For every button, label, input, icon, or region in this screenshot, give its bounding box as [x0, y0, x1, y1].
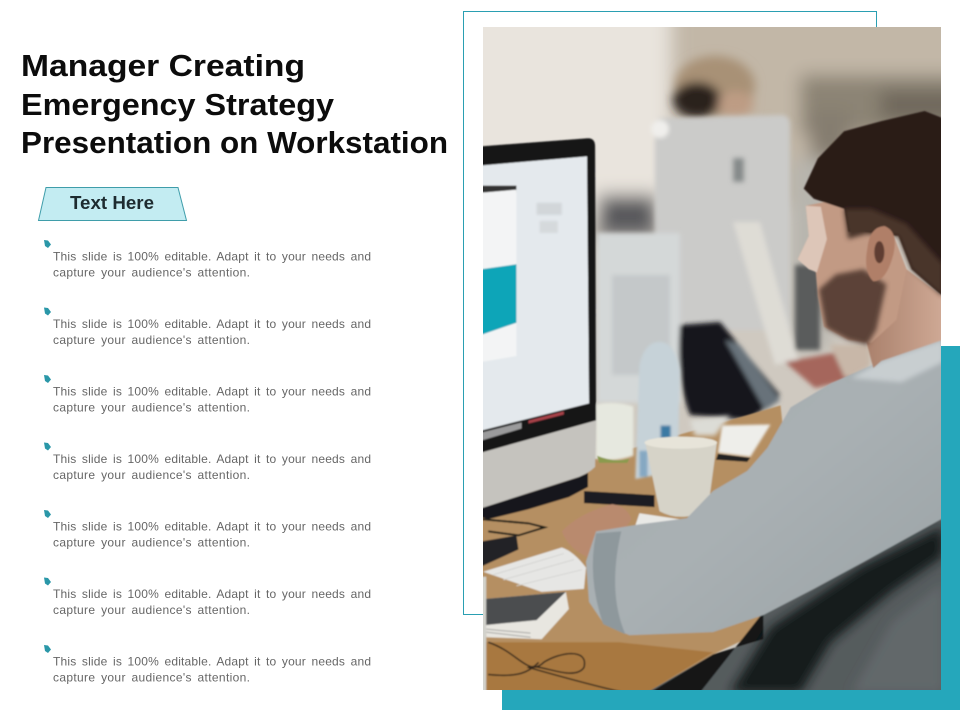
hair	[804, 111, 943, 297]
grey sweater	[586, 340, 943, 635]
bullet item 1	[44, 240, 371, 280]
heading tag: Text Here	[38, 188, 186, 220]
bullet item 7: This slide is 100% editable. Adapt it to your needs and	[53, 654, 371, 668]
photo: man at workstation	[483, 27, 941, 690]
paper on desk	[718, 425, 770, 457]
monitor chin	[481, 420, 596, 508]
bullet item 7	[44, 645, 371, 684]
background wall and shelves	[483, 27, 941, 352]
cables and black phone	[584, 491, 655, 507]
background monitor back	[651, 115, 790, 330]
heading tag: Text Here: Text Here	[70, 193, 154, 213]
title	[21, 48, 448, 160]
bullet item 2: capture your audience's attention.	[53, 333, 250, 347]
bullet item 5	[44, 510, 371, 550]
cable on desk	[488, 642, 624, 693]
bullet item 1: This slide is 100% editable. Adapt it to your needs and	[53, 250, 371, 264]
teal backing block	[502, 346, 960, 710]
bullet list	[44, 240, 371, 684]
neck	[863, 269, 943, 368]
bullet item 2: This slide is 100% editable. Adapt it to your needs and	[53, 317, 371, 331]
background person	[673, 56, 755, 118]
ear	[866, 226, 895, 281]
keyboard	[483, 513, 680, 592]
hand	[562, 504, 631, 558]
small paper cup behind	[596, 403, 633, 460]
bullet item 4: capture your audience's attention.	[53, 468, 250, 482]
bullet item 5: capture your audience's attention.	[53, 536, 250, 550]
bullet item 6	[44, 578, 371, 617]
thin outline frame	[464, 12, 876, 614]
bullet item 6: capture your audience's attention.	[53, 603, 250, 617]
torso dark shirt	[650, 518, 941, 690]
bullet item 6: This slide is 100% editable. Adapt it to your needs and	[53, 587, 371, 601]
title: Presentation on Workstation	[21, 125, 448, 160]
face	[798, 199, 907, 343]
title: Emergency Strategy	[21, 87, 335, 122]
bullet item 4: This slide is 100% editable. Adapt it to your needs and	[53, 452, 371, 466]
bullet item 7: capture your audience's attention.	[53, 670, 250, 684]
bullet item 4	[44, 442, 371, 482]
water bottle	[635, 342, 680, 479]
desk surface	[481, 405, 791, 693]
bullet item 3: capture your audience's attention.	[53, 400, 250, 414]
bullet item 5: This slide is 100% editable. Adapt it to your needs and	[53, 520, 371, 534]
coffee cup	[644, 437, 717, 517]
bullet item 2	[44, 308, 371, 347]
bullet item 1: capture your audience's attention.	[53, 266, 250, 280]
foreground monitor	[481, 138, 596, 519]
bullet item 3	[44, 375, 371, 414]
notebook	[485, 592, 569, 639]
bullet item 3: This slide is 100% editable. Adapt it to your needs and	[53, 384, 371, 398]
title: Manager Creating	[21, 48, 305, 83]
blurred desk clutter	[597, 222, 870, 420]
